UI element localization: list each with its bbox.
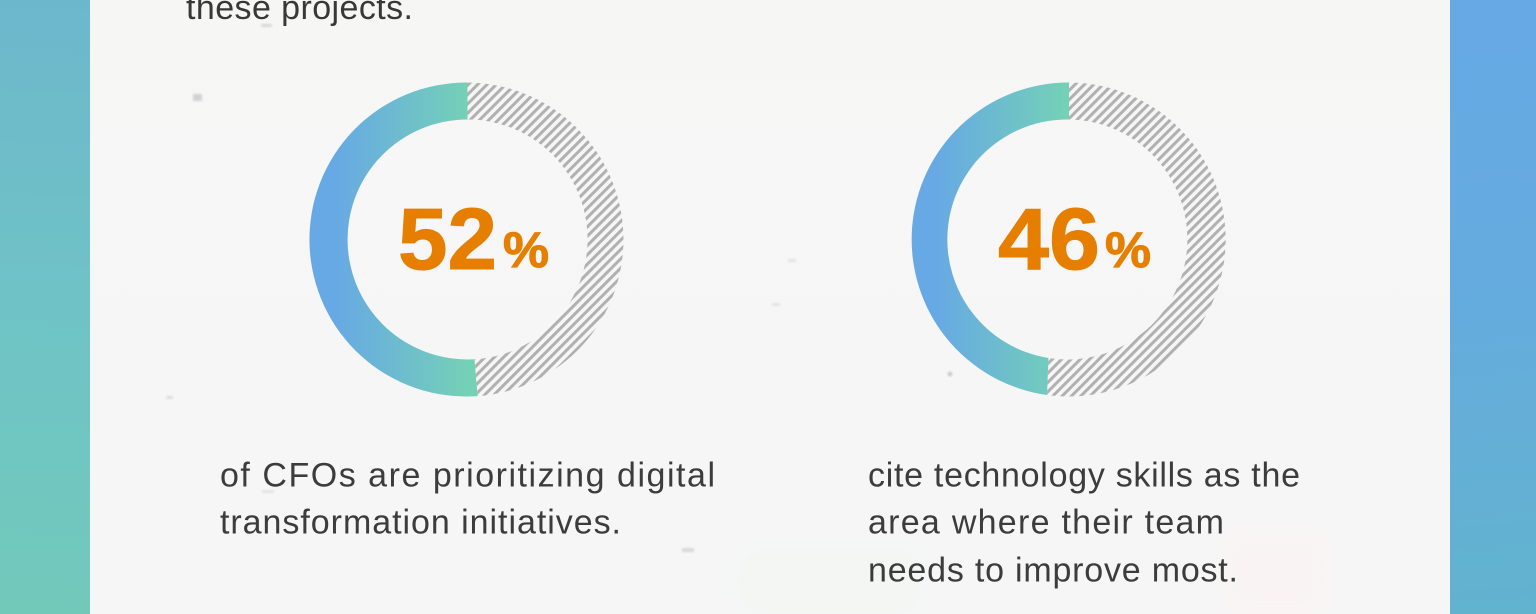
remaining share hatched arc	[1047, 82, 1226, 396]
caption: 52% statistic	[220, 456, 715, 542]
value: 52%: 52	[398, 191, 497, 288]
caption: 46% statistic: cite technology skills as the	[868, 456, 1300, 494]
caption: 52% statistic: of CFOs are prioritizing digital	[220, 456, 715, 494]
caption: 52% statistic: transformation initiatives.	[220, 504, 621, 542]
46 percent gradient arc	[912, 82, 1069, 395]
right background strip	[1450, 0, 1536, 614]
52 percent gradient arc	[309, 82, 478, 396]
remaining share hatched arc	[468, 82, 623, 396]
value: 46%: %	[1105, 222, 1151, 278]
donut chart: 46%	[912, 82, 1226, 396]
caption: 46% statistic	[868, 456, 1300, 590]
value: 52%	[398, 191, 549, 288]
value: 46%: 46	[998, 191, 1100, 288]
caption: 46% statistic: needs to improve most.	[868, 552, 1238, 590]
value: 52%: %	[503, 222, 549, 278]
value: 46%	[998, 191, 1151, 288]
donut chart: 52%	[309, 82, 623, 396]
left background strip	[0, 0, 90, 614]
caption: 46% statistic: area where their team	[868, 504, 1224, 542]
